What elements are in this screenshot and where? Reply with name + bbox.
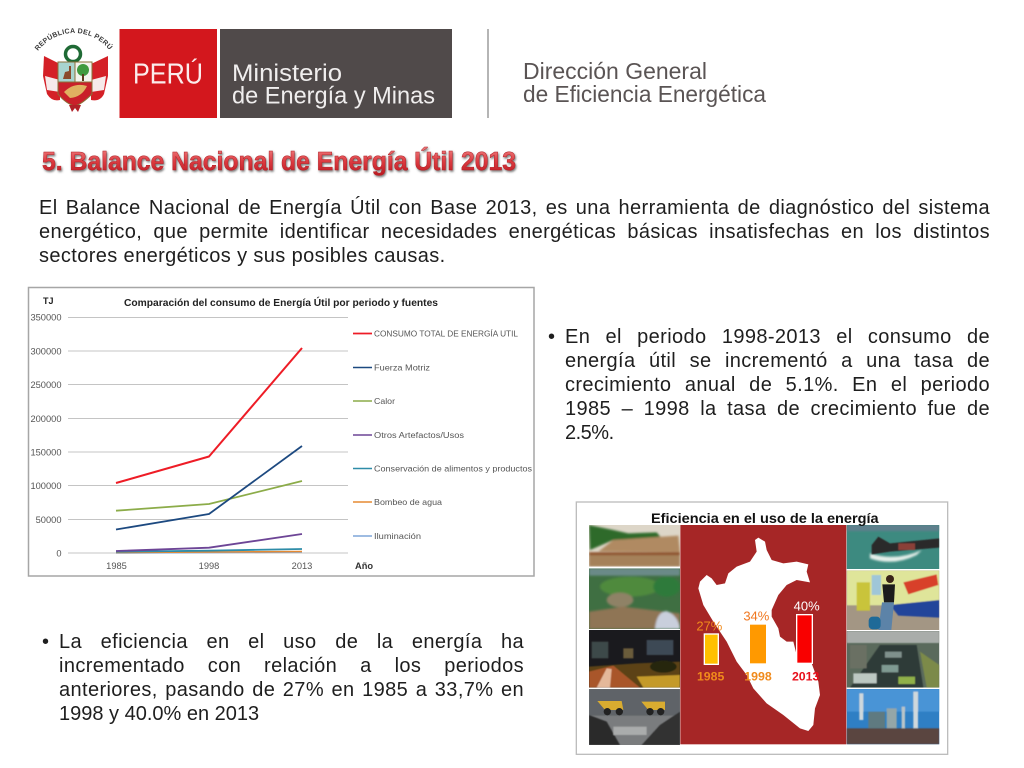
intro paragraph: energético, que permite identificar necesidades energéticas básicas insatisfechas en los distintos [39, 221, 990, 243]
photo: woman with gas cylinder [847, 570, 939, 630]
panel: efficiency in energy use [576, 502, 948, 754]
y axis labels: 200000 [30, 414, 62, 424]
y axis labels: 300000 [30, 346, 62, 356]
x axis labels: 1998 [199, 561, 219, 571]
logo: Perú red block [120, 29, 217, 118]
intro paragraph: El Balance Nacional de Energía Útil con Base 2013, es una herramienta de diagnóstico del sistema [39, 197, 990, 219]
bullet: growth rate: • [548, 326, 555, 348]
bullet: efficiency: • [42, 631, 49, 653]
photo: refinery [847, 689, 939, 744]
legend: Bombeo de agua [374, 497, 442, 507]
legend: Calor [374, 396, 395, 406]
x axis labels: 1985 [106, 561, 127, 571]
bar 1998: 1998 [744, 669, 772, 683]
y axis labels: 150000 [30, 448, 62, 458]
bullet: growth rate [548, 326, 990, 444]
legend: CONSUMO TOTAL DE ENERGÍA UTIL [374, 328, 518, 338]
data lines [116, 348, 302, 553]
bar 2013: 2013 [792, 669, 820, 683]
photo: mining trucks [589, 689, 680, 745]
legend: Otros Artefactos/Usos [374, 430, 464, 440]
legend [353, 328, 532, 541]
heading: Dirección General de Eficiencia Energética: de Eficiencia Energética [523, 81, 766, 107]
x axis labels: 2013 [292, 561, 312, 571]
panel: line chart [28, 288, 534, 576]
bullet: growth rate: 1985 – 1998 la tasa de crecimiento fue de [565, 398, 990, 420]
y axis labels [30, 312, 62, 558]
photo: timber barge [589, 525, 680, 567]
y axis labels: 0 [56, 548, 62, 558]
bar 2013: 40% [794, 598, 820, 613]
photo: river boat [847, 525, 939, 569]
bullet: growth rate: 2.5%. [565, 422, 614, 444]
bar 1985: 27% [696, 618, 723, 633]
title: 5. Balance Nacional de Energía Útil 2013 [42, 146, 516, 176]
bullet: growth rate: crecimiento anual de 5.1%. En el periodo [565, 374, 990, 396]
emblem: coat of arms of Peru [34, 28, 114, 112]
bullet: efficiency: anteriores, pasando de 27% en 1985 a 33,7% en [59, 679, 524, 701]
bar 2013 [792, 598, 820, 683]
intro paragraph [39, 196, 990, 267]
bar 1998: 34% [743, 608, 770, 623]
bullet: growth rate: energía útil se incrementó a una tasa de [565, 350, 990, 372]
logo: Ministerio de Energía y Minas: de Energía y Minas [232, 82, 435, 110]
x axis unit: Año [355, 561, 373, 571]
heading: Dirección General de Eficiencia Energética: Dirección General [523, 58, 707, 84]
legend: Iluminación [374, 531, 421, 541]
bullet: efficiency [42, 631, 524, 725]
y axis labels: 350000 [30, 312, 62, 322]
y axis labels: 50000 [36, 515, 62, 525]
logo: Perú red block: PERÚ [133, 58, 203, 90]
photo: city highway at night [589, 630, 680, 688]
y axis labels: 250000 [30, 380, 62, 390]
heading: Dirección General de Eficiencia Energética [523, 58, 766, 107]
logo: Ministerio de Energía y Minas [220, 29, 452, 118]
bullet: growth rate: En el periodo 1998-2013 el consumo de [565, 326, 990, 348]
bar 1985 [696, 618, 725, 683]
bullet: efficiency: La eficiencia en el uso de la energía ha [59, 631, 524, 653]
logo: Ministerio de Energía y Minas: Ministerio [232, 60, 342, 87]
bar 1998 [743, 608, 772, 683]
y axis labels: 100000 [30, 481, 62, 491]
photo: forest pipeline [589, 568, 680, 629]
chart title: Comparación del consumo de Energía Útil por periodo y fuentes [124, 297, 439, 309]
y axis unit: TJ [43, 296, 54, 306]
legend: Conservación de alimentos y productos [374, 464, 532, 474]
bullet: efficiency: 1998 y 40.0% en 2013 [59, 703, 259, 725]
x axis labels [106, 561, 312, 571]
map of Peru [698, 538, 820, 731]
bar 1985: 1985 [697, 669, 725, 683]
bullet: efficiency: incrementado con relación a los periodos [59, 655, 524, 677]
photo: traffic jam [847, 631, 939, 688]
legend: Fuerza Motriz [374, 362, 430, 372]
red background [680, 525, 846, 744]
panel title: Eficiencia en el uso de la energía [651, 510, 879, 526]
intro paragraph: sectores energéticos y sus posibles causas. [39, 245, 446, 267]
emblem: coat of arms of Peru: REPÚBLICA DEL PERÚ [34, 28, 114, 51]
